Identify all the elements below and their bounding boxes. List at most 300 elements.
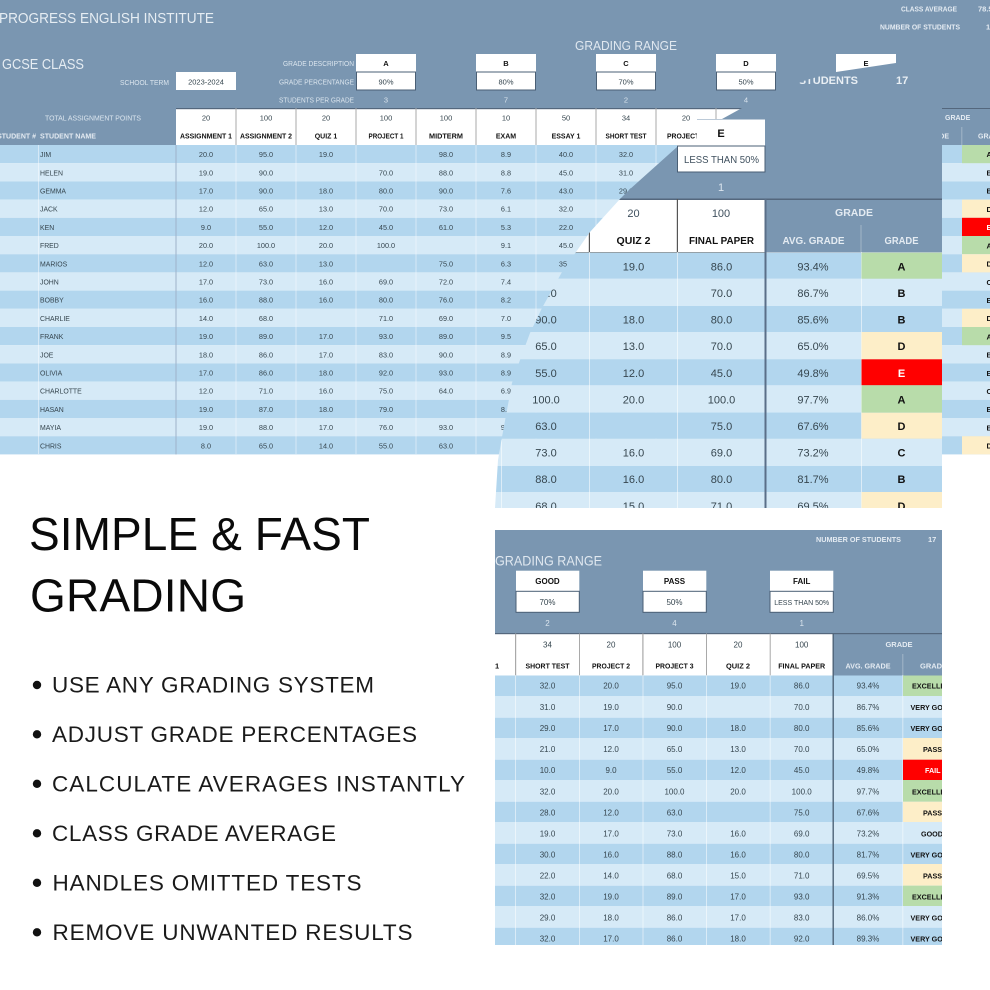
student rows: 32.0 bbox=[559, 205, 573, 214]
student rows: FRED bbox=[40, 243, 59, 250]
table rows: 19.0 bbox=[623, 261, 644, 273]
table rows: VERY GOOD bbox=[910, 850, 954, 860]
student rows: 71.0 bbox=[259, 387, 273, 396]
grade E box: 1 bbox=[718, 182, 724, 194]
column headers: EXAM bbox=[496, 134, 516, 140]
column headers: QUIZ 1 bbox=[315, 134, 337, 140]
headline: GRADING bbox=[30, 570, 246, 622]
student rows: 43.0 bbox=[559, 186, 573, 196]
table rows: 68.0 bbox=[667, 872, 683, 880]
student rows: 7.6 bbox=[501, 186, 511, 196]
table rows: 73.2% bbox=[857, 830, 879, 838]
table rows: 93.4% bbox=[857, 682, 879, 690]
student rows: 9.0 bbox=[201, 223, 211, 232]
table rows: 20.0 bbox=[730, 788, 746, 796]
table header: QUIZ 2 bbox=[726, 662, 750, 670]
column headers bbox=[0, 108, 990, 145]
table rows: PASS bbox=[923, 872, 942, 880]
student rows: 8.2 bbox=[501, 296, 511, 305]
table rows: 32.0 bbox=[540, 682, 556, 690]
table rows: 93.4% bbox=[797, 261, 829, 273]
student rows: JIM bbox=[40, 152, 51, 159]
table rows: 90.0 bbox=[535, 315, 557, 327]
student rows: 20.0 bbox=[199, 150, 213, 159]
student rows: 79.0 bbox=[379, 405, 393, 414]
table rows: 55.0 bbox=[535, 368, 557, 380]
table rows: VERY GOOD bbox=[910, 934, 954, 944]
column headers: STUDENT NAME bbox=[40, 134, 96, 140]
feature list bbox=[33, 672, 465, 945]
student rows: 17.0 bbox=[199, 368, 213, 378]
student rows: 95.0 bbox=[259, 150, 273, 159]
column headers: 20 bbox=[202, 114, 210, 122]
table rows: 20.0 bbox=[603, 682, 619, 690]
table rows: D bbox=[898, 501, 906, 513]
table rows: D bbox=[898, 421, 906, 433]
student rows: 8.8 bbox=[501, 168, 511, 177]
table rows: VERY GOOD bbox=[910, 724, 954, 733]
column headers: 100 bbox=[380, 114, 392, 122]
student rows: FRANK bbox=[40, 334, 64, 341]
student rows: 89.0 bbox=[439, 332, 453, 341]
table rows: 65.0% bbox=[797, 341, 829, 353]
student rows: 35.0 bbox=[559, 259, 573, 268]
table rows: 15.0 bbox=[623, 501, 644, 513]
student rows: 12.0 bbox=[199, 387, 213, 396]
table rows: 80.0 bbox=[794, 724, 810, 733]
table rows: C bbox=[898, 448, 906, 460]
student rows: CHARLIE bbox=[40, 316, 70, 323]
table rows: 65.0 bbox=[667, 745, 683, 754]
student rows: JOHN bbox=[40, 280, 59, 286]
student rows: KEN bbox=[40, 225, 54, 232]
table rows: 80.0 bbox=[794, 850, 810, 860]
student rows: 20.0 bbox=[199, 241, 213, 250]
table rows: 86.7% bbox=[857, 703, 879, 712]
table rows: VERY GOOD bbox=[910, 914, 954, 922]
table rows: 85.6% bbox=[857, 724, 879, 733]
student rows: BOBBY bbox=[40, 298, 64, 305]
student rows: 17.0 bbox=[199, 186, 213, 196]
student rows: 73.0 bbox=[259, 278, 273, 286]
students count: STUDENTS bbox=[799, 75, 858, 87]
table header: FINAL PAPER bbox=[689, 236, 755, 247]
grade boxes: 1 bbox=[799, 619, 804, 628]
student rows: 32.0 bbox=[619, 150, 633, 159]
student rows: 19.0 bbox=[319, 150, 333, 159]
student rows: 7.0 bbox=[501, 314, 511, 323]
table rows: 13.0 bbox=[623, 341, 644, 353]
table rows: 73.2% bbox=[797, 448, 829, 460]
student rows: 88.0 bbox=[259, 296, 273, 305]
student rows: 93.0 bbox=[439, 423, 453, 432]
table rows: 49.8% bbox=[857, 766, 879, 775]
table rows: 100.0 bbox=[708, 394, 735, 406]
student rows: 98.0 bbox=[439, 150, 453, 159]
table header: GRADE bbox=[835, 207, 873, 219]
table header: PROJECT 3 bbox=[656, 662, 694, 670]
student rows: 17.0 bbox=[199, 278, 213, 286]
student rows: 68.0 bbox=[259, 314, 273, 323]
column headers: 100 bbox=[440, 114, 452, 122]
column headers: 100 bbox=[260, 114, 272, 122]
column headers: SHORT TEST bbox=[606, 134, 647, 140]
table rows: EXCELLENT bbox=[912, 788, 955, 796]
student rows: 8.0 bbox=[201, 441, 211, 450]
table rows: B bbox=[898, 474, 906, 486]
student rows: 9.5 bbox=[501, 332, 511, 341]
student rows: 64.0 bbox=[439, 387, 453, 396]
student rows: 69.0 bbox=[439, 314, 453, 323]
class statistics: CLASS AVERAGE bbox=[901, 4, 957, 14]
table rows: 81.7% bbox=[797, 474, 829, 486]
student rows: 9.0 bbox=[501, 423, 511, 432]
student rows: 14.0 bbox=[199, 314, 213, 323]
school term field: 2023-2024 bbox=[188, 78, 224, 86]
bullet 4: CLASS GRADE AVERAGE bbox=[52, 821, 336, 846]
grade boxes: 70% bbox=[618, 78, 634, 86]
table rows: 65.0% bbox=[857, 745, 879, 754]
headline bbox=[29, 508, 370, 622]
table rows: 97.7% bbox=[797, 394, 829, 406]
student rows: CHRIS bbox=[40, 443, 62, 450]
table rows: B bbox=[898, 315, 906, 327]
table rows: 18.0 bbox=[730, 934, 746, 944]
table rows: 45.0 bbox=[711, 368, 732, 380]
table rows: 81.7% bbox=[857, 850, 879, 860]
student rows bbox=[40, 150, 633, 450]
table rows: 55.0 bbox=[667, 766, 683, 775]
student rows: 18.0 bbox=[199, 350, 213, 359]
student rows: 20.0 bbox=[319, 241, 333, 250]
students count bbox=[800, 76, 908, 84]
table header: FINAL PAPER bbox=[778, 662, 826, 670]
table rows: 19.0 bbox=[603, 892, 619, 902]
student rows: 18.0 bbox=[319, 186, 333, 196]
student rows: HELEN bbox=[40, 170, 63, 177]
table rows: 69.0 bbox=[794, 830, 810, 838]
student rows: 100.0 bbox=[377, 241, 395, 250]
grade boxes: 90% bbox=[378, 78, 394, 86]
student rows: CHARLOTTE bbox=[40, 389, 82, 396]
column headers: 10 bbox=[502, 114, 510, 122]
table header bbox=[495, 633, 947, 676]
student rows: 12.0 bbox=[199, 205, 213, 214]
table rows: 90.0 bbox=[667, 724, 683, 733]
grade boxes: D bbox=[743, 59, 749, 68]
table rows: 10.0 bbox=[540, 766, 556, 775]
student rows: 55.0 bbox=[379, 441, 393, 450]
table rows: PASS bbox=[923, 808, 942, 818]
table rows: 90.0 bbox=[535, 288, 557, 300]
table rows: 17.0 bbox=[730, 892, 746, 902]
grade boxes: 4 bbox=[672, 619, 677, 628]
table rows: 86.0 bbox=[794, 682, 810, 690]
student rows: 76.0 bbox=[439, 296, 453, 305]
grade boxes: LESS THAN 50% bbox=[774, 598, 830, 607]
grade E box bbox=[677, 120, 765, 194]
student rows: 6.9 bbox=[501, 387, 511, 396]
table rows: 86.0% bbox=[857, 914, 879, 922]
table rows: 70.0 bbox=[711, 341, 732, 353]
number of students: 17 bbox=[928, 535, 936, 544]
table header: GRADE bbox=[884, 236, 919, 247]
table header: 20 bbox=[734, 640, 743, 650]
student rows: 90.0 bbox=[439, 186, 453, 196]
student rows: 55.0 bbox=[259, 223, 273, 232]
table rows: 32.0 bbox=[540, 934, 556, 944]
table rows: 86.0 bbox=[711, 261, 732, 273]
student rows: 6.1 bbox=[501, 205, 511, 214]
row labels for grade table: GRADE PERCENTANGE bbox=[279, 78, 354, 86]
grade boxes bbox=[356, 54, 896, 104]
table rows: 73.0 bbox=[535, 448, 557, 460]
grade boxes: 7 bbox=[504, 96, 508, 104]
table rows: 29.0 bbox=[540, 724, 556, 733]
table rows: 75.0 bbox=[794, 808, 810, 818]
table header: AVG. GRADE bbox=[782, 236, 845, 247]
table rows: 100.0 bbox=[792, 788, 812, 796]
grade boxes: 4 bbox=[744, 96, 748, 104]
column headers: 20 bbox=[682, 114, 690, 122]
grade boxes: 2 bbox=[545, 619, 550, 628]
student rows: 17.0 bbox=[319, 423, 333, 432]
grade boxes bbox=[516, 571, 833, 628]
bullet 6: REMOVE UNWANTED RESULTS bbox=[52, 920, 412, 945]
student rows: GEMMA bbox=[40, 188, 66, 196]
table rows: 12.0 bbox=[603, 808, 619, 818]
table rows: 70.0 bbox=[794, 745, 810, 754]
table rows: 70.0 bbox=[711, 288, 732, 300]
table rows: B bbox=[898, 288, 906, 300]
class statistics bbox=[880, 4, 990, 32]
student rows: 86.0 bbox=[259, 350, 273, 359]
student rows: 12.0 bbox=[199, 259, 213, 268]
table rows: 71.0 bbox=[711, 501, 732, 513]
student rows: 14.0 bbox=[319, 441, 333, 450]
table rows: 16.0 bbox=[730, 830, 746, 838]
table rows: 100.0 bbox=[664, 788, 685, 796]
table rows: FAIL bbox=[925, 766, 941, 775]
student rows: 18.0 bbox=[319, 368, 333, 378]
table rows: 88.0 bbox=[667, 850, 683, 860]
table rows: 17.0 bbox=[730, 914, 746, 922]
student rows: MAYIA bbox=[40, 425, 61, 432]
column headers: ESSAY 1 bbox=[552, 134, 581, 140]
table rows: 75.0 bbox=[711, 421, 732, 433]
table rows: 85.6% bbox=[797, 315, 829, 327]
table rows: 21.0 bbox=[540, 745, 556, 754]
panel: back spreadsheet bbox=[0, 0, 990, 454]
grade boxes: B bbox=[503, 59, 509, 68]
table rows: EXCELLENT bbox=[912, 892, 955, 902]
table rows: 49.8% bbox=[797, 368, 829, 380]
table rows: D bbox=[898, 341, 906, 353]
table row stripes bbox=[0, 145, 990, 454]
table rows: 19.0 bbox=[603, 703, 619, 712]
column headers: 34 bbox=[622, 114, 630, 122]
table rows: 14.0 bbox=[603, 872, 619, 880]
table header: 20 bbox=[627, 208, 640, 220]
grading range heading: GRADING RANGE bbox=[495, 552, 602, 568]
table rows: 91.3% bbox=[857, 892, 879, 902]
student rows: 90.0 bbox=[439, 350, 453, 359]
table rows: 97.7% bbox=[857, 788, 879, 796]
student rows: 8.4 bbox=[501, 405, 511, 414]
student rows: 16.0 bbox=[199, 296, 213, 305]
table rows: 70.0 bbox=[794, 703, 810, 712]
school term field bbox=[120, 72, 236, 90]
table rows: 32.0 bbox=[540, 892, 556, 902]
grade E box: LESS THAN 50% bbox=[684, 154, 759, 166]
row labels for grade table: GRADE DESCRIPTION bbox=[283, 59, 354, 68]
table rows: 86.0 bbox=[667, 934, 683, 944]
student rows: 13.0 bbox=[319, 259, 333, 268]
table rows: 17.0 bbox=[603, 724, 619, 733]
table rows: 63.0 bbox=[535, 421, 557, 433]
table rows: 83.0 bbox=[794, 914, 810, 922]
headline: SIMPLE & FAST bbox=[29, 508, 370, 560]
student rows: 100.0 bbox=[257, 241, 275, 250]
student rows: 9.1 bbox=[501, 241, 511, 250]
table rows: 80.0 bbox=[711, 474, 732, 486]
student rows: 17.0 bbox=[319, 350, 333, 359]
student rows: 16.0 bbox=[319, 296, 333, 305]
student rows: 6.3 bbox=[501, 259, 511, 268]
column headers: 50 bbox=[562, 114, 570, 122]
table rows: 71.0 bbox=[794, 872, 810, 880]
student rows: 16.0 bbox=[319, 278, 333, 286]
student rows: 63.0 bbox=[259, 259, 273, 268]
table rows: 12.0 bbox=[603, 745, 619, 754]
grade boxes: 50% bbox=[738, 78, 754, 86]
grade boxes: 50% bbox=[666, 598, 683, 607]
table header: SHORT TEST bbox=[526, 662, 570, 670]
table rows: 13.0 bbox=[730, 745, 746, 754]
student rows: 17.0 bbox=[319, 332, 333, 341]
table rows: 73.0 bbox=[667, 830, 683, 838]
student rows: 45.0 bbox=[559, 241, 573, 250]
grade boxes: 2 bbox=[624, 96, 628, 104]
student rows: 73.0 bbox=[439, 205, 453, 214]
student rows: 72.0 bbox=[439, 278, 453, 286]
student rows: 63.0 bbox=[439, 441, 453, 450]
table rows: PASS bbox=[923, 745, 942, 754]
table rows: 80.0 bbox=[711, 315, 732, 327]
student rows: 65.0 bbox=[259, 205, 273, 214]
student rows: 12.0 bbox=[319, 223, 333, 232]
table rows: 69.5% bbox=[857, 872, 879, 880]
table rows: 93.0 bbox=[794, 892, 810, 902]
table rows: 86.0 bbox=[667, 914, 683, 922]
table rows: 95.0 bbox=[535, 261, 557, 273]
student rows: 90.0 bbox=[259, 168, 273, 177]
table rows: 92.0 bbox=[794, 934, 810, 944]
table header: 20 bbox=[607, 640, 616, 650]
student rows: 83.0 bbox=[379, 350, 393, 359]
student rows: 8.9 bbox=[501, 350, 511, 359]
student rows: 5.3 bbox=[501, 223, 511, 232]
student rows: 71.0 bbox=[379, 314, 393, 323]
table rows: 30.0 bbox=[540, 850, 556, 860]
table rows: 31.0 bbox=[540, 703, 556, 712]
table rows: 88.0 bbox=[535, 474, 557, 486]
table rows: 86.7% bbox=[797, 288, 829, 300]
grade boxes: PASS bbox=[664, 577, 686, 586]
student rows: HASAN bbox=[40, 407, 64, 414]
table rows: 32.0 bbox=[540, 788, 556, 796]
student rows: 61.0 bbox=[439, 223, 453, 232]
table rows: 22.0 bbox=[540, 872, 556, 880]
table rows: 18.0 bbox=[623, 315, 644, 327]
table rows: 67.6% bbox=[797, 421, 829, 433]
table rows: 12.0 bbox=[623, 368, 644, 380]
student rows: 86.0 bbox=[259, 368, 273, 378]
table rows: 16.0 bbox=[603, 850, 619, 860]
school term field: SCHOOL TERM bbox=[120, 78, 169, 87]
student rows: JOE bbox=[40, 352, 54, 359]
student rows: 70.0 bbox=[379, 168, 393, 177]
student rows: MARIOS bbox=[40, 261, 68, 268]
table rows: 18.0 bbox=[603, 914, 619, 922]
grade boxes: 70% bbox=[539, 598, 556, 607]
student rows: 93.0 bbox=[379, 332, 393, 341]
student rows: 13.0 bbox=[319, 205, 333, 214]
table rows: 16.0 bbox=[730, 850, 746, 860]
table rows: 65.0 bbox=[535, 341, 557, 353]
panel: zoomed page-curl spreadsheet bbox=[490, 40, 942, 513]
student rows: 18.0 bbox=[319, 405, 333, 414]
column headers: MIDTERM bbox=[429, 134, 463, 140]
class statistics: NUMBER OF STUDENTS bbox=[880, 22, 960, 32]
table rows: EXCELLENT bbox=[912, 682, 955, 690]
table header: 100 bbox=[712, 208, 730, 220]
table header: GRADE bbox=[885, 640, 913, 649]
column headers: PROJECT 1 bbox=[368, 134, 404, 140]
table rows: 28.0 bbox=[540, 808, 556, 818]
table rows: 90.0 bbox=[667, 703, 683, 712]
table rows bbox=[495, 634, 955, 945]
column headers: GRADE bbox=[945, 115, 971, 122]
student rows: 7.4 bbox=[501, 278, 511, 286]
student rows: 80.0 bbox=[379, 186, 393, 196]
table rows: VERY GOOD bbox=[910, 703, 954, 712]
table header: GRADE bbox=[920, 662, 947, 670]
back grade column bbox=[962, 145, 990, 454]
row labels for grade table: STUDENTS PER GRADE bbox=[279, 96, 354, 104]
table header: AVG. GRADE bbox=[846, 662, 890, 670]
student rows: 21.0 bbox=[619, 205, 633, 214]
table header: QUIZ 2 bbox=[616, 236, 651, 247]
table rows: 17.0 bbox=[603, 830, 619, 838]
table rows bbox=[490, 199, 942, 513]
table rows: A bbox=[898, 394, 906, 406]
table rows: 20.0 bbox=[603, 788, 619, 796]
table rows: 15.0 bbox=[730, 872, 746, 880]
student rows: 93.0 bbox=[439, 368, 453, 378]
table header: 100 bbox=[795, 640, 809, 650]
student rows: 87.0 bbox=[259, 405, 273, 414]
table rows: 69.5% bbox=[797, 501, 829, 513]
table header: PROJECT 2 bbox=[592, 662, 630, 670]
row labels for grade table bbox=[279, 59, 354, 104]
student rows: 31.0 bbox=[619, 168, 633, 177]
class name: GCSE CLASS bbox=[2, 56, 84, 73]
table rows: 12.0 bbox=[730, 766, 746, 775]
student rows: 19.0 bbox=[199, 168, 213, 177]
number of students: NUMBER OF STUDENTS bbox=[816, 535, 901, 544]
student rows: 19.0 bbox=[199, 405, 213, 414]
